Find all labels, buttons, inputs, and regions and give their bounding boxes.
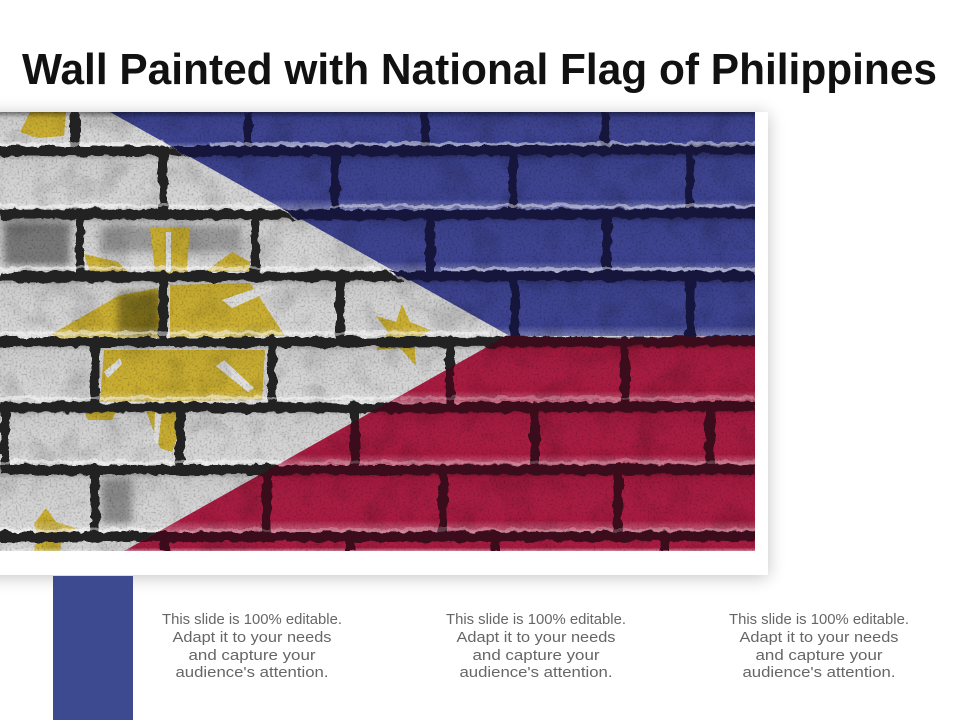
- blue accent bar: [53, 576, 133, 720]
- image: brick wall painted with Philippine flag: [0, 112, 755, 551]
- text block: column 3: and capture your: [756, 648, 883, 664]
- sun and stars: [20, 112, 430, 551]
- text block: column 2: audience's attention.: [460, 665, 612, 681]
- panel: white photo card with shadow: [0, 112, 768, 575]
- text block: column 3: [729, 612, 909, 681]
- title: Wall Painted with National Flag of Philippines: [22, 45, 937, 94]
- mortar joints: [0, 112, 755, 551]
- text block: column 3: This slide is 100% editable.: [729, 612, 909, 628]
- text block: column 1: and capture your: [188, 648, 316, 664]
- flag colour fields: [0, 112, 755, 551]
- text block: column 2: and capture your: [472, 648, 600, 664]
- surface texture: [0, 112, 755, 551]
- painted highlights along the brick edges: [0, 144, 755, 530]
- brick shading: [0, 112, 755, 551]
- text block: column 1: audience's attention.: [176, 665, 328, 681]
- text block: column 1: Adapt it to your needs: [172, 630, 332, 646]
- text block: column 2: Adapt it to your needs: [456, 630, 616, 646]
- text block: column 1: This slide is 100% editable.: [162, 612, 342, 628]
- text block: column 2: [446, 612, 626, 681]
- text block: column 3: Adapt it to your needs: [740, 630, 898, 646]
- text block: column 1: [162, 612, 342, 681]
- text block: column 2: This slide is 100% editable.: [446, 612, 626, 628]
- text block: column 3: audience's attention.: [742, 665, 896, 681]
